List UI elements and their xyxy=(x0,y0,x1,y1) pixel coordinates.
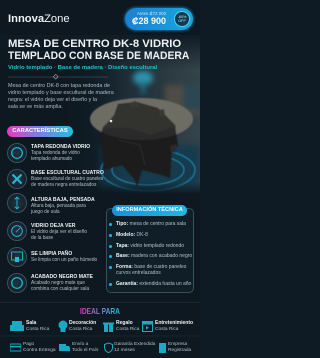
feature: base escultural: Base escultural de cuatro paneles xyxy=(31,176,103,182)
spec rows: Base: madera con acabado negro xyxy=(116,253,192,259)
feature: acabado negro: ACABADO NEGRO MATE xyxy=(31,274,93,280)
description: vidrio templado y base escultural de madera xyxy=(8,90,114,96)
icon: ring xyxy=(7,273,27,293)
use case: decoración xyxy=(58,320,96,332)
title: MESA DE CENTRO DK-8 VIDRIO xyxy=(8,38,181,50)
product photo: glass table in a room xyxy=(89,38,200,192)
use case: regalo: Costa Rica xyxy=(116,326,139,332)
use case: sala: Sala xyxy=(26,320,36,326)
feature: tapa redonda: Tapa redonda de vidrio xyxy=(31,150,80,156)
discount circle: -60% xyxy=(178,15,186,19)
current price: ₡28 900 xyxy=(132,16,166,26)
feature: se limpia: SE LIMPIA PAÑO xyxy=(31,251,72,257)
icon: plant xyxy=(58,320,68,332)
feature: base escultural xyxy=(7,169,104,189)
feature: vidrio deja ver: de la base xyxy=(31,235,53,241)
icon: clapperboard xyxy=(142,321,153,332)
spec rows: Tipo: mesa de centro para sala xyxy=(116,221,186,227)
icon: circle xyxy=(7,143,27,163)
icon: card xyxy=(10,344,21,352)
icon: glass view xyxy=(7,221,27,241)
panel: información técnica xyxy=(106,205,194,293)
service: garantía xyxy=(104,342,156,353)
spec rows: Tapa: vidrio templado redondo xyxy=(116,243,184,249)
use case: sala: Costa Rica xyxy=(26,326,49,332)
use case: decoración: Decoración xyxy=(69,320,96,326)
title: TEMPLADO CON BASE DE MADERA xyxy=(8,50,189,62)
service: garantía: Garantía Extendida xyxy=(114,342,155,347)
service: pago contra entrega: Pago xyxy=(23,342,34,347)
feature: vidrio deja ver: El vidrio deja ver el diseño xyxy=(31,229,87,235)
use case: entretenimiento xyxy=(142,320,193,332)
icon: height arrow xyxy=(7,193,27,213)
heading xyxy=(112,205,187,216)
discount circle xyxy=(174,11,190,27)
icon: truck xyxy=(59,344,70,351)
service: envío: Envío a xyxy=(72,342,88,347)
icon: cleaning cloth xyxy=(7,247,27,267)
heading: ideal para: IDEAL PARA xyxy=(80,306,120,316)
feature: altura baja: ALTURA BAJA, PENSADA xyxy=(31,197,95,203)
title xyxy=(8,38,190,62)
service: pago contra entrega: Contra Entrega xyxy=(23,348,56,352)
feature: vidrio deja ver xyxy=(7,221,87,241)
service: envío: Todo el País xyxy=(72,348,98,352)
subtitle: Vidrio templado · Base de madera · Diseño escultural xyxy=(8,65,157,71)
use case: sala xyxy=(10,320,50,332)
use case: decoración: Costa Rica xyxy=(69,326,92,332)
service: empresa registrada: Registrada xyxy=(168,348,191,352)
spec rows: curvos entrelazados xyxy=(116,270,161,276)
divider xyxy=(8,74,108,80)
icon: sofa xyxy=(10,321,24,331)
brand logo: InnovaZone xyxy=(8,13,70,25)
spec rows: Modelo: DK-8 xyxy=(116,232,148,238)
feature: altura baja xyxy=(7,193,95,215)
use case: regalo: Regalo xyxy=(116,320,133,326)
description: sala se ve más amplia. xyxy=(8,104,63,110)
feature: base escultural: BASE ESCULTURAL CUATRO xyxy=(31,170,104,176)
service: envío xyxy=(59,342,98,352)
feature: se limpia: Se limpia con un paño húmedo xyxy=(31,257,97,263)
heading: INFORMACIÓN TÉCNICA xyxy=(116,207,183,213)
panel frame xyxy=(106,208,194,293)
feature: tapa redonda xyxy=(7,143,90,163)
feature: base escultural: de madera negra entrelazados xyxy=(31,182,96,188)
spec rows xyxy=(109,221,192,287)
spec rows: Forma: base de cuatro paneles xyxy=(116,264,186,270)
feature: acabado negro xyxy=(7,273,93,293)
icon: building xyxy=(159,343,166,353)
feature: tapa redonda: TAPA REDONDA VIDRIO xyxy=(31,144,90,150)
service: empresa registrada: Empresa xyxy=(168,342,187,347)
feature: acabado negro: Acabado negro mate que xyxy=(31,280,85,286)
use case: entretenimiento: Entretenimiento xyxy=(155,320,193,326)
spec rows: Garantía: extendida hasta un año xyxy=(116,281,191,287)
description: Mesa de centro DK-8 con tapa redonda de xyxy=(8,83,110,89)
icon: cross base xyxy=(7,169,27,189)
service: pago contra entrega xyxy=(10,342,56,352)
heading: características xyxy=(7,126,73,137)
description xyxy=(8,83,114,110)
price badge xyxy=(125,8,193,30)
icon: shield xyxy=(104,342,113,353)
service: garantía: 12 meses xyxy=(114,348,135,352)
use case: entretenimiento: Costa Rica xyxy=(155,326,178,332)
heading: características: CARACTERÍSTICAS xyxy=(12,128,68,134)
feature: altura baja: juego de sala xyxy=(31,209,60,215)
feature: tapa redonda: templado ahumado xyxy=(31,156,72,162)
icon: gift xyxy=(103,322,114,332)
feature: altura baja: Altura baja, pensada para xyxy=(31,203,86,209)
use case: regalo xyxy=(103,320,140,332)
feature: vidrio deja ver: VIDRIO DEJA VER xyxy=(31,223,75,229)
service: empresa registrada xyxy=(159,342,192,353)
old price: Antes ₡72 000 xyxy=(137,11,166,16)
feature: se limpia xyxy=(7,247,97,267)
feature: acabado negro: combina con cualquier sala xyxy=(31,286,89,292)
discount circle: OFF xyxy=(178,19,186,23)
description: negra: el vidrio deja ver el diseño y la xyxy=(8,97,97,103)
